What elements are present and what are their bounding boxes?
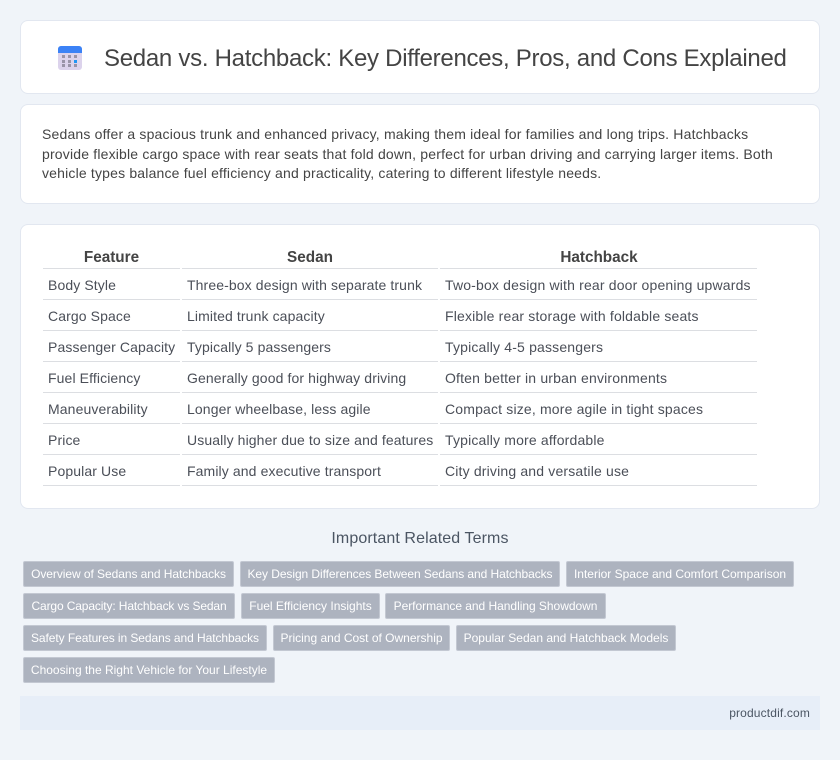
- table rows: Typically more affordable: [445, 432, 605, 448]
- table rows: Longer wheelbase, less agile: [187, 401, 371, 417]
- table rows: Typically 4-5 passengers: [445, 339, 603, 355]
- table rows: City driving and versatile use: [445, 463, 629, 479]
- table rows: Compact size, more agile in tight spaces: [445, 401, 703, 417]
- description text: vehicle types balance fuel efficiency and practicality, catering to different lifestyle needs.: [42, 165, 601, 181]
- icon: calendar: [58, 46, 82, 70]
- comparison table: [43, 249, 757, 486]
- table rows: Flexible rear storage with foldable seats: [445, 308, 699, 324]
- table rows: Body Style: [48, 277, 116, 293]
- title: Sedan vs. Hatchback: Key Differences, Pros, and Cons Explained: [104, 45, 787, 72]
- related term tags: Safety Features in Sedans and Hatchbacks: [31, 631, 259, 645]
- table rows: Two-box design with rear door opening upwards: [445, 277, 751, 293]
- panel: comparison table: [20, 224, 820, 509]
- table rows: Cargo Space: [48, 308, 131, 324]
- table rows: Maneuverability: [48, 401, 148, 417]
- related term tags: Interior Space and Comfort Comparison: [574, 567, 786, 581]
- related term tags: Fuel Efficiency Insights: [249, 599, 372, 613]
- heading: related terms: Important Related Terms: [331, 530, 509, 547]
- panel: header: [20, 20, 820, 94]
- related term tags: Overview of Sedans and Hatchbacks: [31, 567, 226, 581]
- related term tags: Key Design Differences Between Sedans and Hatchbacks: [248, 567, 552, 581]
- related term tags: Popular Sedan and Hatchback Models: [464, 631, 668, 645]
- column headers: [84, 249, 638, 266]
- table rows: Popular Use: [48, 463, 126, 479]
- related term tags: Pricing and Cost of Ownership: [280, 631, 443, 645]
- table rows: Fuel Efficiency: [48, 370, 140, 386]
- comparison table: Feature: [84, 249, 139, 266]
- description text: Sedans offer a spacious trunk and enhanced privacy, making them ideal for families and long trips. Hatchbacks: [42, 126, 748, 142]
- footer: [20, 696, 820, 730]
- related term tags: Choosing the Right Vehicle for Your Lifestyle: [31, 663, 267, 677]
- table rows: Often better in urban environments: [445, 370, 667, 386]
- footer source: productdif.com: [729, 706, 810, 720]
- table rows: Passenger Capacity: [48, 339, 175, 355]
- table rows: Family and executive transport: [187, 463, 381, 479]
- comparison table: Sedan: [287, 249, 333, 266]
- related term tags: Performance and Handling Showdown: [394, 599, 597, 613]
- panel: description: [20, 104, 820, 204]
- table rows: Three-box design with separate trunk: [187, 277, 422, 293]
- description text: [42, 126, 773, 181]
- table rows: Price: [48, 432, 80, 448]
- related term tags: Cargo Capacity: Hatchback vs Sedan: [31, 599, 227, 613]
- related term tags: [23, 561, 794, 683]
- table rows: Usually higher due to size and features: [187, 432, 433, 448]
- description text: provide flexible cargo space with rear seats that fold down, perfect for urban driving and carrying larger items. Both: [42, 146, 773, 162]
- table rows: Typically 5 passengers: [187, 339, 331, 355]
- comparison table: Hatchback: [560, 249, 638, 266]
- table rows: Generally good for highway driving: [187, 370, 406, 386]
- table rows: Limited trunk capacity: [187, 308, 325, 324]
